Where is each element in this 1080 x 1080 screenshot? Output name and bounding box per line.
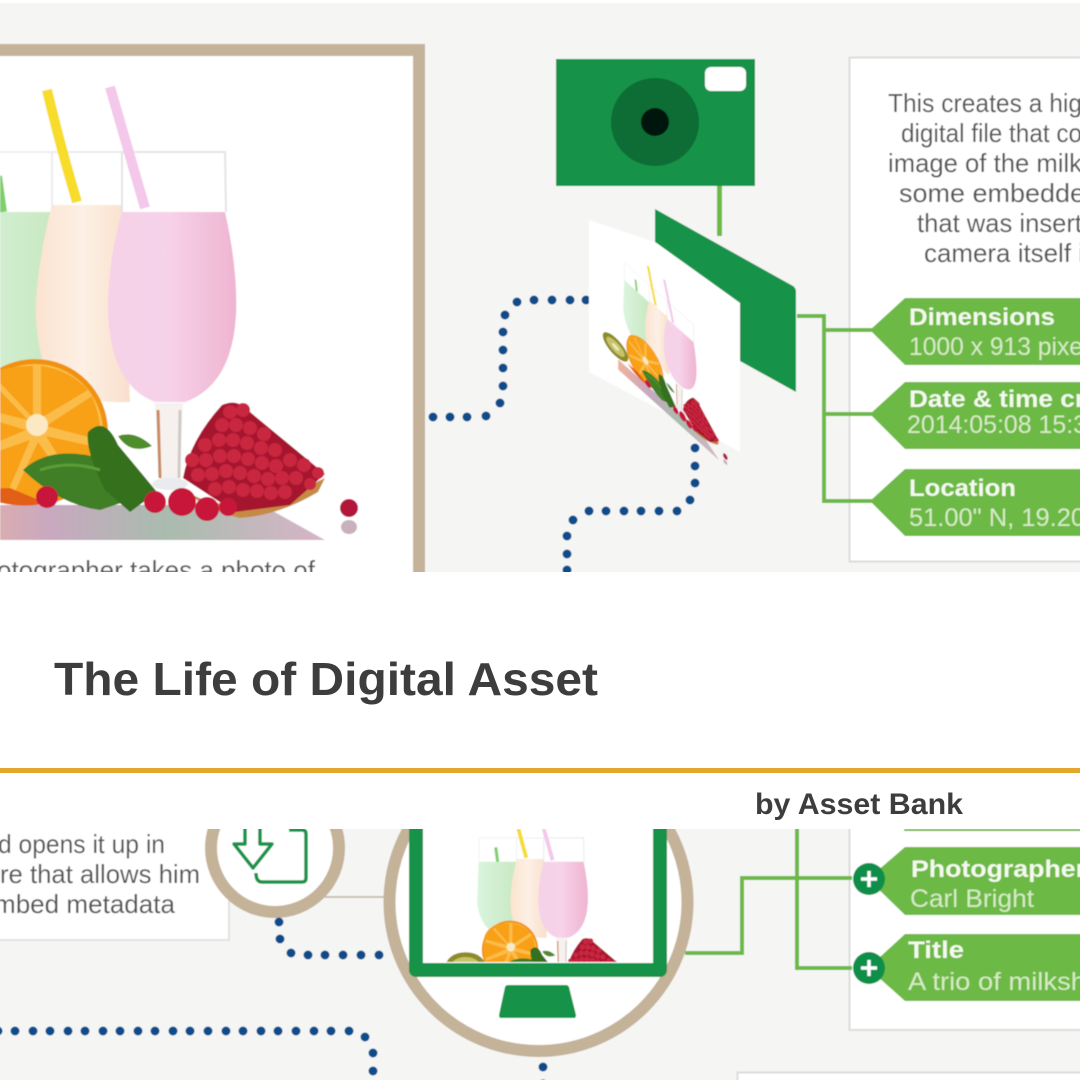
panel: software description — [0, 829, 230, 941]
connector between circles — [325, 896, 390, 898]
lower infographic crop — [0, 829, 1080, 1080]
monitor screen image — [446, 829, 618, 963]
tag: date and time — [870, 382, 1080, 449]
description text: camera itself i — [924, 238, 1080, 268]
icon: import arrow — [234, 825, 306, 882]
dotted path: lower route — [0, 1026, 548, 1080]
tag: photographer: Carl Bright — [910, 885, 1034, 913]
tag: dimensions: Dimensions — [909, 304, 1055, 331]
panel: next step — [738, 1072, 1080, 1080]
icon: plus — [853, 952, 885, 984]
icon: camera — [556, 59, 755, 186]
panel: embedded metadata — [848, 829, 1080, 1031]
photo of milkshakes and fruit — [0, 87, 358, 540]
connector: monitor to metadata tags — [685, 820, 852, 968]
byline: by Asset Bank — [755, 788, 963, 821]
icon: monitor circle — [383, 829, 694, 1058]
tag: location: Location — [909, 475, 1016, 502]
tag: dimensions — [870, 298, 1080, 365]
tag: photographer — [853, 847, 1080, 915]
software description text: re that allows him — [0, 859, 200, 889]
dotted path: photo to camera — [428, 296, 590, 422]
software description text: d opens it up in — [0, 829, 165, 859]
icon: digital file back panel — [655, 209, 796, 392]
tag: title: Title — [908, 937, 964, 964]
photo caption: otographer takes a photo of — [0, 555, 316, 585]
dotted path: file downward — [562, 444, 700, 574]
tag: title — [853, 934, 1080, 1001]
tag: title: A trio of milksh — [908, 968, 1080, 996]
description text: image of the milk — [888, 148, 1080, 178]
description text — [888, 88, 1080, 268]
tag: location — [870, 469, 1080, 536]
software description text — [0, 833, 199, 914]
dotted path: import to monitor — [274, 918, 384, 960]
tag: location: 51.00" N, 19.20 — [909, 504, 1080, 532]
tag: photographer: Photographer — [911, 856, 1080, 883]
panel: milkshake photo — [0, 50, 419, 590]
upper infographic crop — [0, 3, 1080, 590]
title: The Life of Digital Asset — [54, 653, 598, 705]
tag: date and time: Date & time cr — [909, 386, 1080, 413]
monitor stand — [499, 985, 576, 1018]
icon: import circle — [204, 829, 346, 918]
icon: plus — [853, 863, 885, 895]
gold divider — [0, 768, 1080, 773]
description text: some embedde — [899, 178, 1080, 208]
panel: file description — [850, 58, 1080, 562]
connector: file to metadata tags — [797, 316, 872, 501]
monitor frame — [416, 820, 660, 970]
description text: that was insert — [917, 208, 1080, 238]
connector: camera to file — [717, 186, 722, 236]
icon: digital file photo — [589, 220, 740, 468]
